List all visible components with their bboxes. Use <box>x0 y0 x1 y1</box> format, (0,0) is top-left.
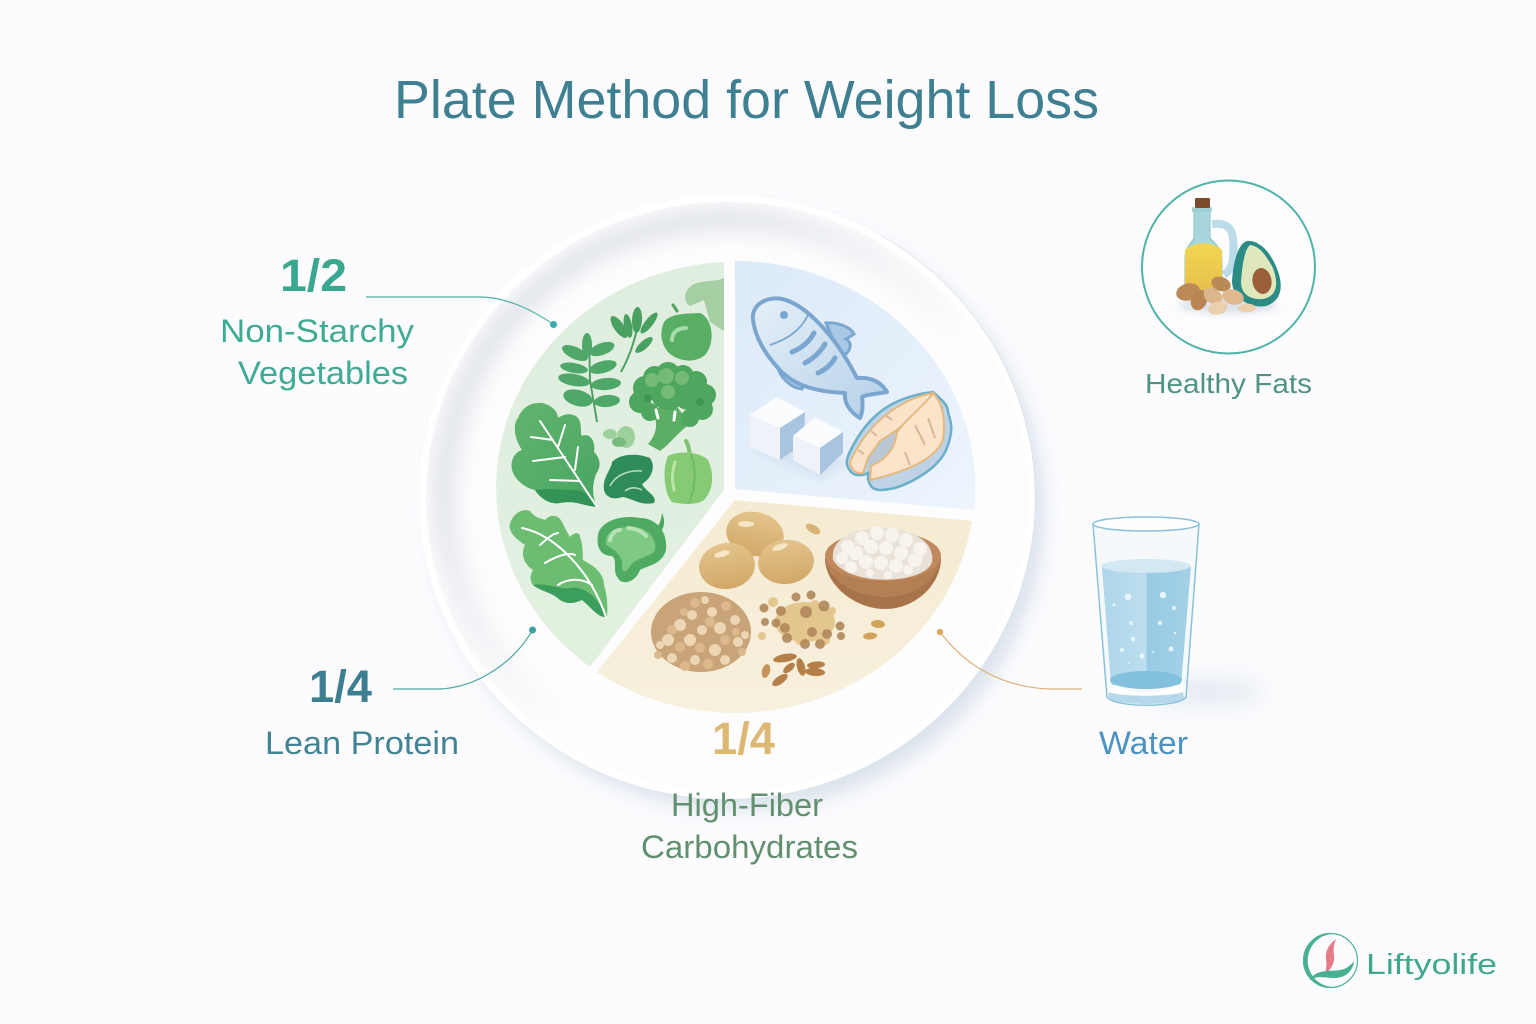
icon: almonds <box>1174 274 1256 317</box>
icon: apple <box>661 305 712 361</box>
panel: vegetables segment <box>496 262 724 667</box>
label: one half vegetables: Vegetables <box>238 355 408 391</box>
label: one quarter lean protein <box>265 661 459 761</box>
label: one half vegetables: 1/2 <box>280 250 347 301</box>
icon: herb branch <box>557 333 621 422</box>
icon: small leaf <box>603 426 635 448</box>
icon: water glass <box>1093 517 1265 705</box>
logo: Liftyolife <box>1366 949 1497 981</box>
icon: seeds <box>760 522 885 688</box>
icon: green pepper blob <box>598 513 666 582</box>
label: one quarter lean protein: Lean Protein <box>265 725 459 761</box>
icon: oak leaf lettuce <box>512 403 600 507</box>
icon: bowl of rice <box>825 526 941 609</box>
icon: grain mound <box>651 592 751 672</box>
label: one half vegetables <box>220 250 414 391</box>
label: one half vegetables: Non-Starchy <box>220 313 414 349</box>
title: Plate Method for Weight Loss <box>394 70 1099 130</box>
icon: broccoli <box>629 362 716 451</box>
icon: dark leafy green <box>604 455 655 504</box>
icon: avocado <box>1232 241 1281 306</box>
label: one quarter lean protein: 1/4 <box>309 661 372 712</box>
icon: salmon steak <box>847 392 951 490</box>
label: one quarter carbohydrates: Carbohydrates <box>641 829 858 865</box>
icon: tofu cubes <box>748 397 850 480</box>
panel: lean protein segment <box>735 261 975 510</box>
icon: faded broccoli at top <box>685 278 724 331</box>
label: water: Water <box>1099 725 1188 761</box>
icon: potatoes <box>696 506 816 593</box>
connector: lean protein <box>393 626 536 689</box>
icon: logo mark <box>1303 933 1358 988</box>
label: one quarter carbohydrates: High-Fiber <box>671 787 823 823</box>
icon: kale leaf <box>510 510 607 617</box>
panel: carbohydrates segment <box>597 500 972 713</box>
logo <box>1303 933 1497 988</box>
icon: healthy fats circle <box>1142 180 1315 354</box>
label: healthy fats: Healthy Fats <box>1145 368 1312 399</box>
icon: oil bottle <box>1185 198 1234 290</box>
icon: bell pepper <box>665 441 712 504</box>
icon: fish <box>753 298 887 418</box>
plate <box>419 195 1044 810</box>
icon: herb sprig <box>607 307 660 372</box>
label: one quarter carbohydrates <box>641 713 858 865</box>
label: one quarter carbohydrates: 1/4 <box>712 713 775 764</box>
connector: water <box>937 629 1082 689</box>
icon: lentils <box>758 590 845 649</box>
connector: vegetables <box>366 297 557 328</box>
